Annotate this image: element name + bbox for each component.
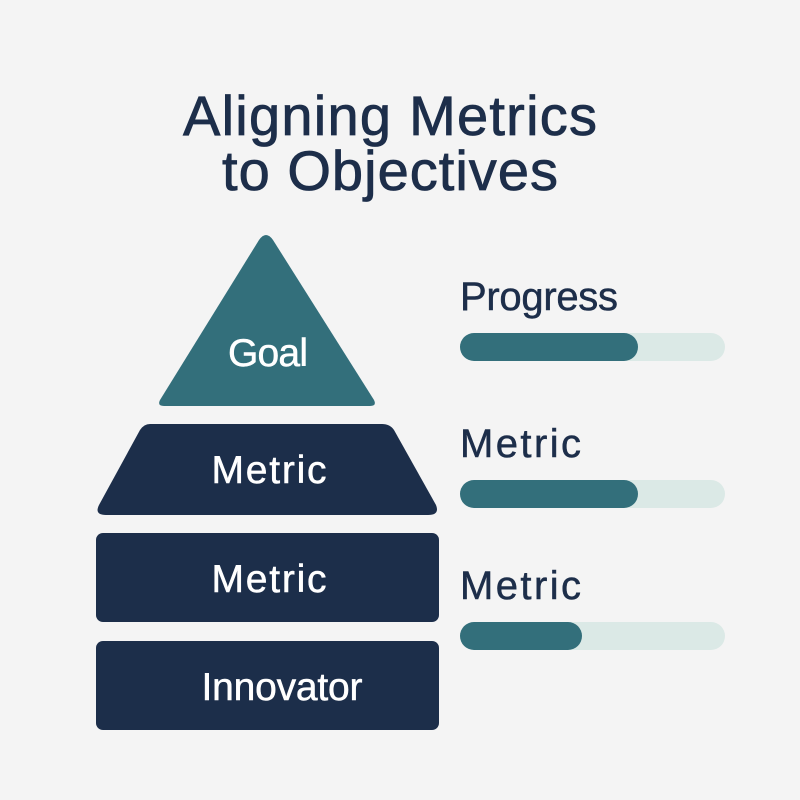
goal triangle xyxy=(159,235,375,406)
innovator block: Innovator xyxy=(202,666,362,709)
metric trapezoid: Metric xyxy=(212,449,326,492)
progress item 3 xyxy=(460,564,725,650)
title xyxy=(183,84,597,202)
title: to Objectives xyxy=(222,139,558,202)
goal triangle: Goal xyxy=(228,332,308,375)
progress item 3: Metric xyxy=(460,564,581,608)
progress item 1 xyxy=(460,275,725,361)
metric block xyxy=(96,533,439,622)
metric block: Metric xyxy=(212,558,326,601)
innovator block xyxy=(96,641,439,730)
progress item 2 xyxy=(460,422,725,508)
title: Aligning Metrics xyxy=(183,84,597,147)
progress item 2: Metric xyxy=(460,422,581,466)
pyramid xyxy=(96,235,439,730)
metric trapezoid xyxy=(98,424,437,515)
progress item 1: Progress xyxy=(460,275,618,319)
